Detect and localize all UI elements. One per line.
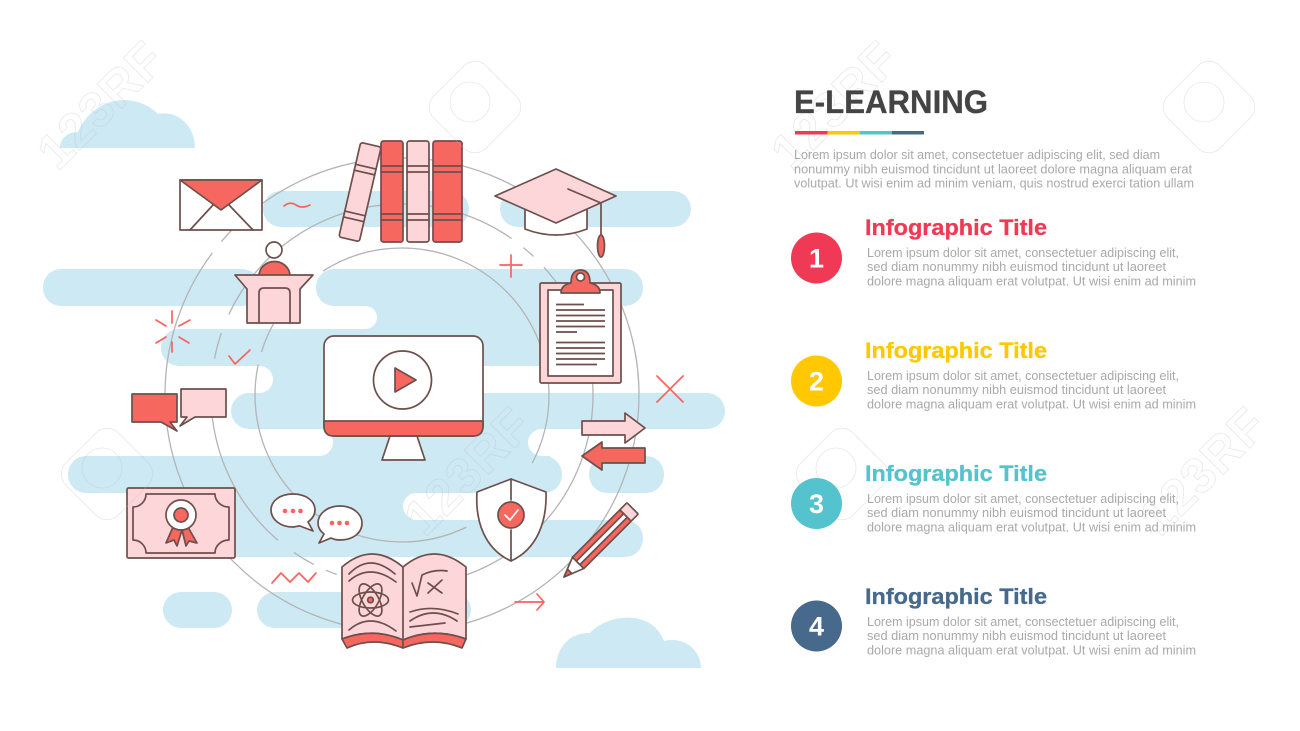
item 2: Infographic Title	[865, 338, 1047, 363]
watermarks: 123RF	[393, 397, 542, 546]
item 4: Infographic Title	[865, 584, 1047, 609]
item 4: Lorem ipsum dolor sit amet, consectetuer adipiscing elit,	[867, 615, 1179, 629]
item 1: sed diam nonummy nibh euismod tincidunt ut laoreet	[867, 260, 1167, 274]
icon: pencil	[558, 503, 638, 583]
item 4: sed diam nonummy nibh euismod tincidunt ut laoreet	[867, 629, 1167, 643]
item 2	[791, 338, 1196, 412]
icon: certificate	[127, 488, 235, 558]
item 4: dolore magna aliquam erat volutpat. Ut wisi enim ad minim	[867, 644, 1196, 658]
icon: envelope	[180, 180, 262, 230]
icon: speech bubbles	[271, 494, 362, 543]
icon: graduation cap	[495, 169, 616, 257]
icon: arrows left and right	[582, 413, 645, 470]
icon: open book	[342, 554, 466, 648]
background: blue bands and clouds	[20, 100, 788, 668]
watermarks: 123RF	[26, 31, 175, 180]
item 4	[791, 584, 1196, 658]
icon: clipboard	[540, 270, 621, 383]
item 1: Infographic Title	[865, 215, 1047, 240]
item 3: Infographic Title	[865, 461, 1047, 486]
intro text: volutpat. Ut wisi enim ad minim veniam, quis nostrud exerci tation ullam	[794, 176, 1194, 190]
intro text: nonummy nibh euismod tincidunt ut laoreet dolore magna aliquam erat	[794, 162, 1193, 176]
item 3	[791, 461, 1196, 534]
watermarks	[26, 31, 1277, 546]
decorative red marks	[156, 203, 683, 610]
item 2: sed diam nonummy nibh euismod tincidunt ut laoreet	[867, 383, 1167, 397]
item 1: 1	[809, 244, 824, 274]
item 3: dolore magna aliquam erat volutpat. Ut wisi enim ad minim	[867, 520, 1196, 534]
item 1	[791, 215, 1196, 288]
icon: books	[339, 141, 462, 242]
icon: shield with check	[477, 479, 546, 561]
intro text: Lorem ipsum dolor sit amet, consectetuer adipiscing elit, sed diam	[794, 148, 1160, 162]
item 3: Lorem ipsum dolor sit amet, consectetuer adipiscing elit,	[867, 492, 1179, 506]
item 1: dolore magna aliquam erat volutpat. Ut wisi enim ad minim	[867, 274, 1196, 288]
concentric rings	[165, 158, 639, 632]
item 3: 3	[809, 489, 824, 519]
watermarks: 123RF	[760, 31, 909, 180]
title: E-LEARNING	[794, 84, 988, 120]
title colour bar	[795, 131, 924, 134]
item 1: Lorem ipsum dolor sit amet, consectetuer adipiscing elit,	[867, 246, 1179, 260]
watermarks: 123RF	[1128, 397, 1277, 546]
item 2: 2	[809, 366, 824, 396]
item 4: 4	[809, 612, 824, 642]
icon: lectern speaker	[235, 242, 313, 323]
icon: video monitor with play button	[324, 336, 483, 460]
item 2: Lorem ipsum dolor sit amet, consectetuer adipiscing elit,	[867, 369, 1179, 383]
item 2: dolore magna aliquam erat volutpat. Ut wisi enim ad minim	[867, 398, 1196, 412]
item 3: sed diam nonummy nibh euismod tincidunt ut laoreet	[867, 506, 1167, 520]
icon: chat boxes	[132, 389, 226, 431]
intro text	[794, 148, 1194, 190]
